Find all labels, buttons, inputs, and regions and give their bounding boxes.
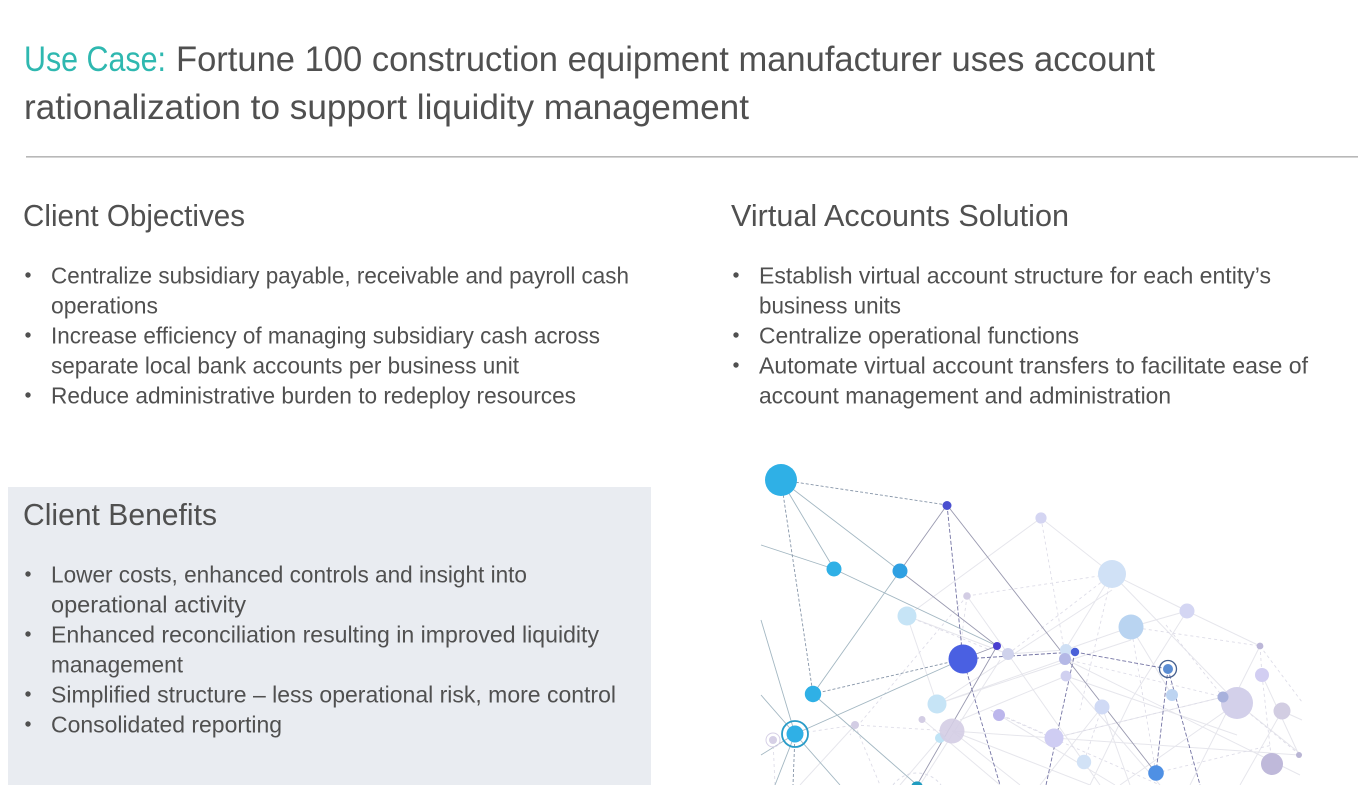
bullet list: client benefits: Simplified structure – less operational risk, more control (51, 682, 616, 708)
bullet list: virtual accounts solution: Centralize operational functions (759, 322, 1079, 348)
panel: virtual accounts solution (731, 198, 1308, 408)
bullet list: client benefits: management (51, 652, 183, 678)
title (24, 40, 1155, 127)
bullet list: client objectives: separate local bank accounts per business unit (51, 352, 519, 378)
bullet list: client objectives: Reduce administrative burden to redeploy resources (51, 382, 576, 408)
panel: client objectives (23, 198, 629, 408)
faint edges (800, 518, 1302, 785)
panel: client benefits (8, 487, 651, 785)
bullet list: client objectives: operations (51, 292, 158, 318)
title: Fortune 100 construction equipment manufacturer uses account (176, 40, 1155, 79)
bullet list: virtual accounts solution: account management and administration (759, 382, 1171, 408)
heading: client objectives: Client Objectives (23, 198, 245, 233)
title: rationalization to support liquidity management (24, 88, 749, 127)
title: Use Case: (24, 40, 166, 79)
bullet list: client benefits: operational activity (51, 592, 246, 618)
bullet list: client objectives (25, 262, 629, 408)
bullet list: client objectives: Increase efficiency of managing subsidiary cash across (51, 322, 600, 348)
heading: client benefits: Client Benefits (23, 497, 217, 532)
bullet list: client objectives: Centralize subsidiary payable, receivable and payroll cash (51, 262, 629, 288)
heading: virtual accounts solution: Virtual Accounts Solution (731, 198, 1069, 233)
bullet list: client benefits (25, 562, 616, 738)
strong edges (761, 480, 997, 785)
network nodes (765, 464, 1302, 785)
bullet list: virtual accounts solution: Automate virtual account transfers to facilitate ease of (759, 352, 1308, 378)
bullet list: client benefits: Enhanced reconciliation resulting in improved liquidity (51, 622, 599, 648)
bullet list: virtual accounts solution: Establish virtual account structure for each entity’s (759, 262, 1271, 288)
bullet list: virtual accounts solution: business units (759, 292, 901, 318)
bullet list: virtual accounts solution (733, 262, 1308, 408)
bullet list: client benefits: Lower costs, enhanced controls and insight into (51, 562, 527, 588)
bullet list: client benefits: Consolidated reporting (51, 712, 282, 738)
network illustration (761, 464, 1302, 785)
